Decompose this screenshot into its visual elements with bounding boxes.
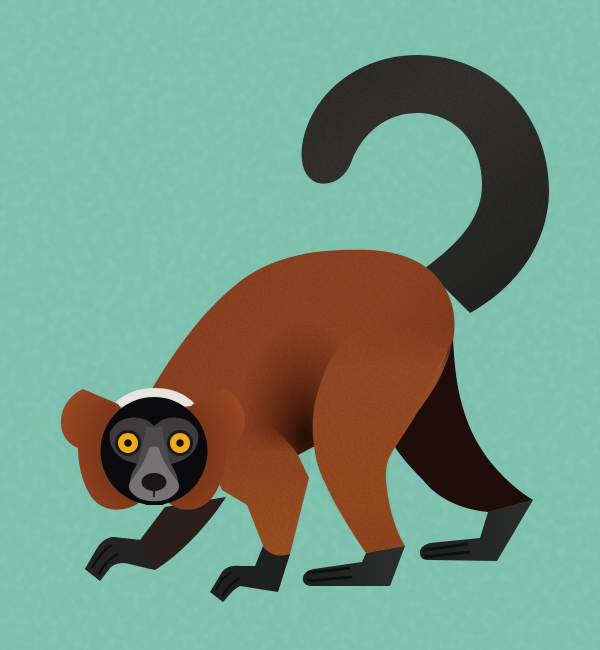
- white crown: [113, 388, 196, 412]
- far front hand: [85, 537, 151, 581]
- near front foot: [210, 546, 290, 602]
- far hand fingers: [92, 545, 118, 574]
- face: mouth line: [153, 490, 155, 497]
- right ruff and ear: [160, 389, 245, 510]
- near hind foot: [303, 546, 405, 586]
- body: [152, 250, 455, 455]
- face: nose bridge: [130, 426, 178, 484]
- far front arm: [85, 497, 226, 581]
- left eye socket: [115, 430, 141, 456]
- right eye socket: [167, 430, 193, 456]
- far hind toes: [424, 544, 470, 557]
- left ruff and ear: [61, 389, 150, 510]
- right eye: [170, 433, 190, 453]
- face: black mask: [100, 397, 208, 505]
- left eye: [118, 433, 138, 453]
- face: nose: [142, 473, 166, 491]
- front foot toes: [216, 572, 240, 596]
- tail: [302, 55, 549, 313]
- near front leg: [190, 425, 309, 556]
- near hind leg: [313, 300, 455, 553]
- face: eye patches and forehead: [110, 418, 198, 470]
- near hind toes: [307, 568, 352, 581]
- fur grain: [150, 250, 455, 556]
- face: muzzle: [129, 446, 179, 502]
- face: mouth area: [141, 499, 168, 505]
- far hind leg: [395, 338, 533, 512]
- face: [100, 397, 208, 505]
- far hind foot: [420, 500, 533, 561]
